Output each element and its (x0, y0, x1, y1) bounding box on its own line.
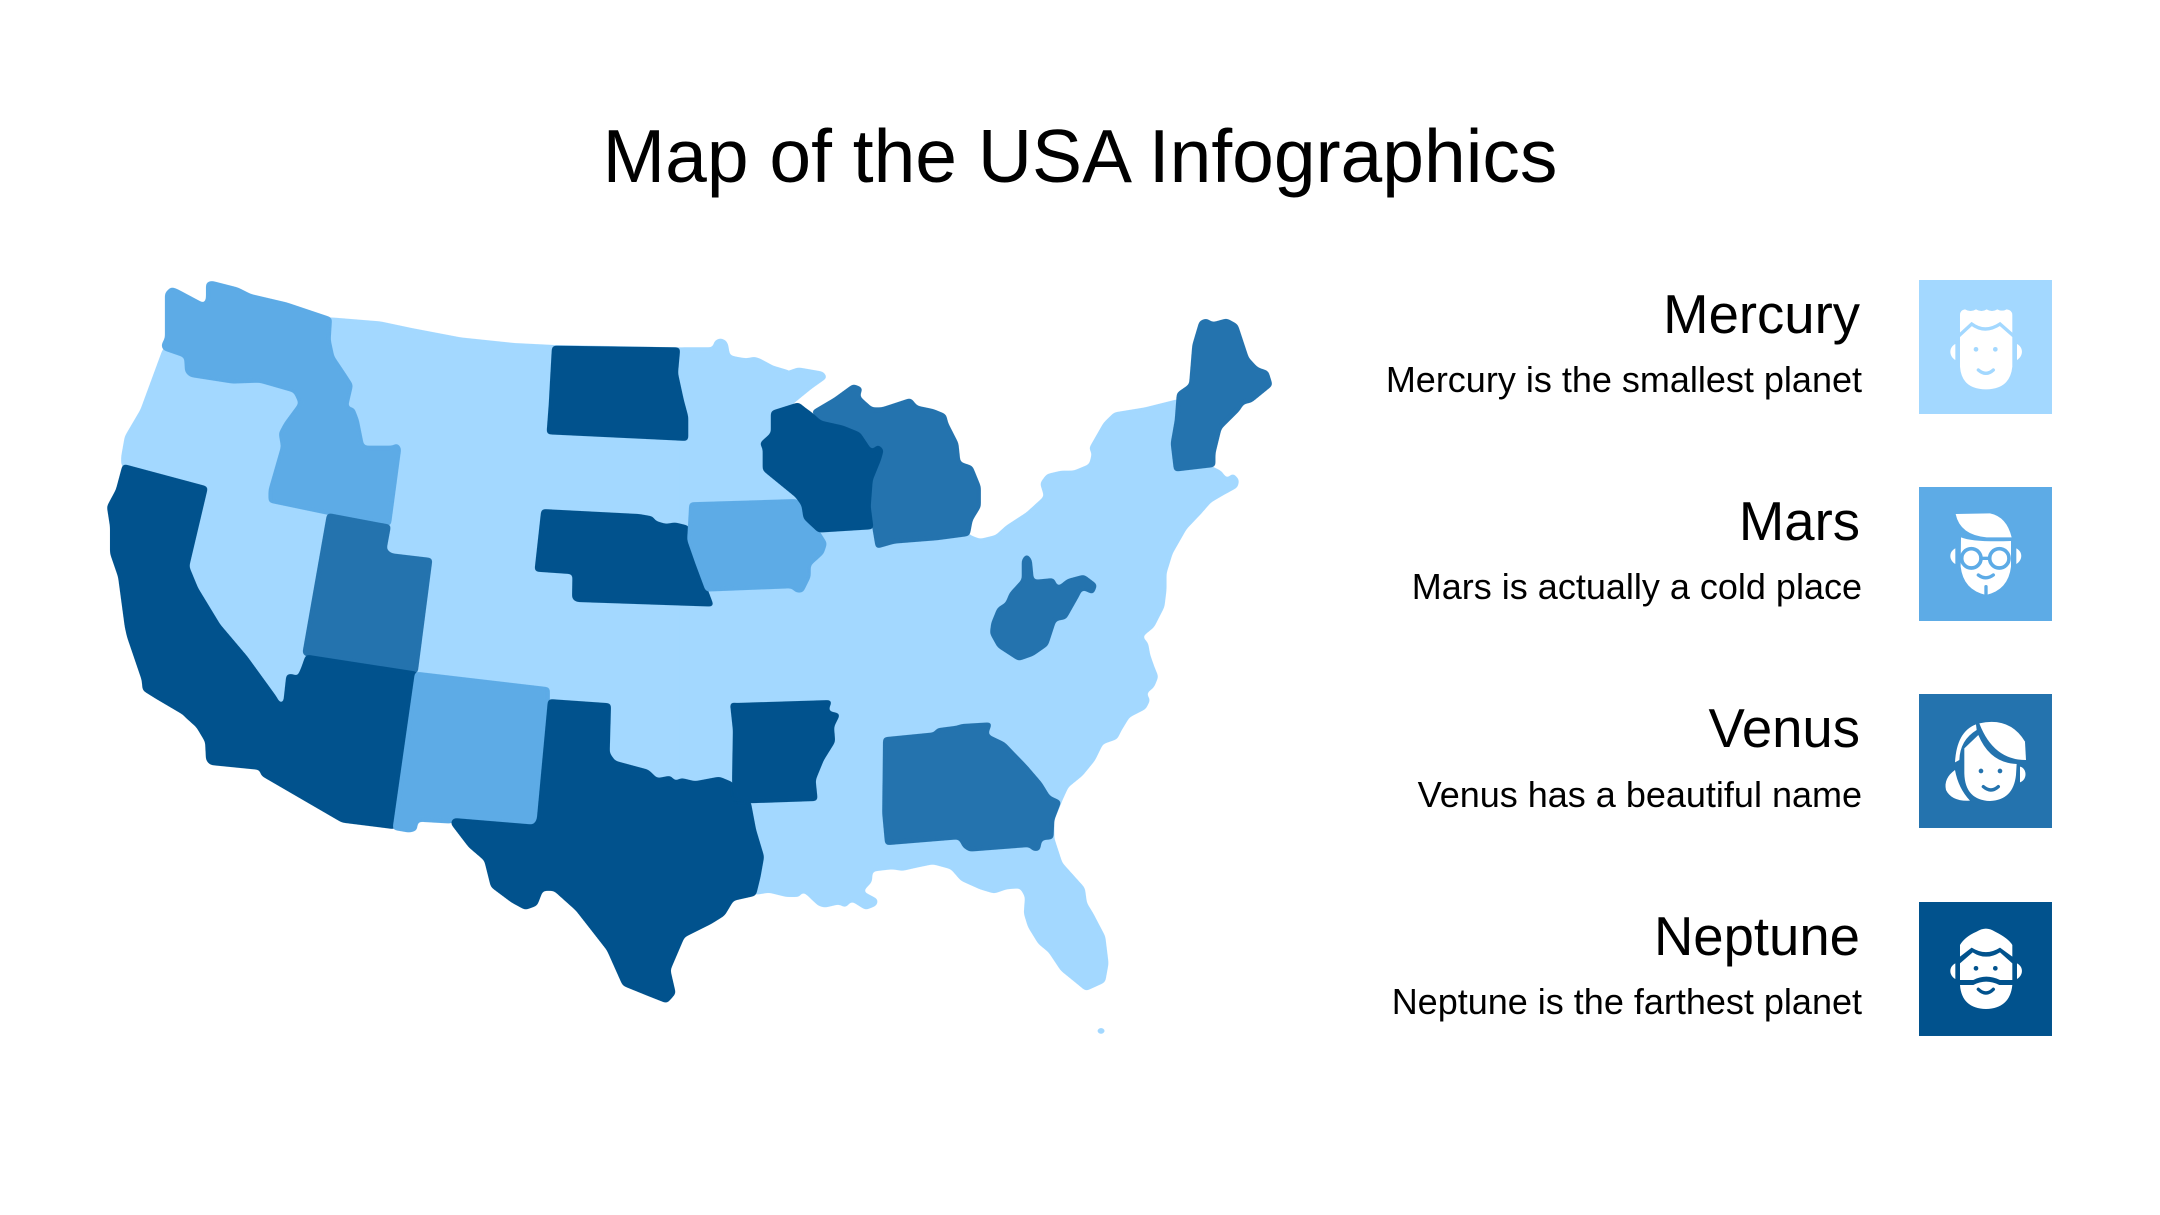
heading: Mercury: Mercury (1663, 284, 1861, 345)
description: Mars: Mars is actually a cold place (1412, 566, 1862, 607)
state: California and Arizona (108, 465, 417, 828)
state: Washington and Idaho (162, 282, 400, 525)
item: Neptune (1392, 902, 2052, 1036)
title: Map of the USA Infographics (603, 114, 1557, 198)
state: Utah (303, 514, 431, 673)
state: West Virginia (991, 555, 1096, 660)
icon tile: Venus face (1919, 694, 2052, 828)
states: eastern highlighted (688, 319, 1272, 851)
region: light blue eastern states (680, 339, 1238, 1034)
state: Arkansas (731, 701, 839, 802)
icon tile: Mars face with glasses (1919, 487, 2052, 621)
state: Wisconsin (761, 403, 883, 532)
description: Venus: Venus has a beautiful name (1418, 774, 1862, 815)
description: Mercury: Mercury is the smallest planet (1386, 359, 1862, 400)
icon tile: Mercury face (1919, 280, 2052, 414)
state: Michigan (813, 385, 980, 548)
item: Mercury (1386, 280, 2052, 414)
state: Nebraska (536, 510, 713, 606)
state: New Mexico (394, 673, 549, 832)
region: light blue western states (122, 318, 790, 827)
icon tile: Neptune bearded face (1919, 902, 2052, 1036)
state: North Dakota (548, 347, 687, 440)
state: Texas (452, 700, 763, 1002)
item: Mars (1412, 487, 2052, 621)
states: western highlighted (108, 282, 763, 1002)
map of the USA (108, 282, 1272, 1034)
state: Iowa (688, 500, 826, 592)
item: Venus (1418, 694, 2052, 828)
heading: Mars: Mars (1739, 491, 1860, 552)
state: Georgia (883, 723, 1060, 851)
heading: Venus: Venus (1708, 698, 1860, 759)
description: Neptune: Neptune is the farthest planet (1392, 981, 1862, 1022)
state: Maine, New Hampshire, Vermont (1172, 319, 1272, 471)
heading: Neptune: Neptune (1654, 906, 1860, 967)
